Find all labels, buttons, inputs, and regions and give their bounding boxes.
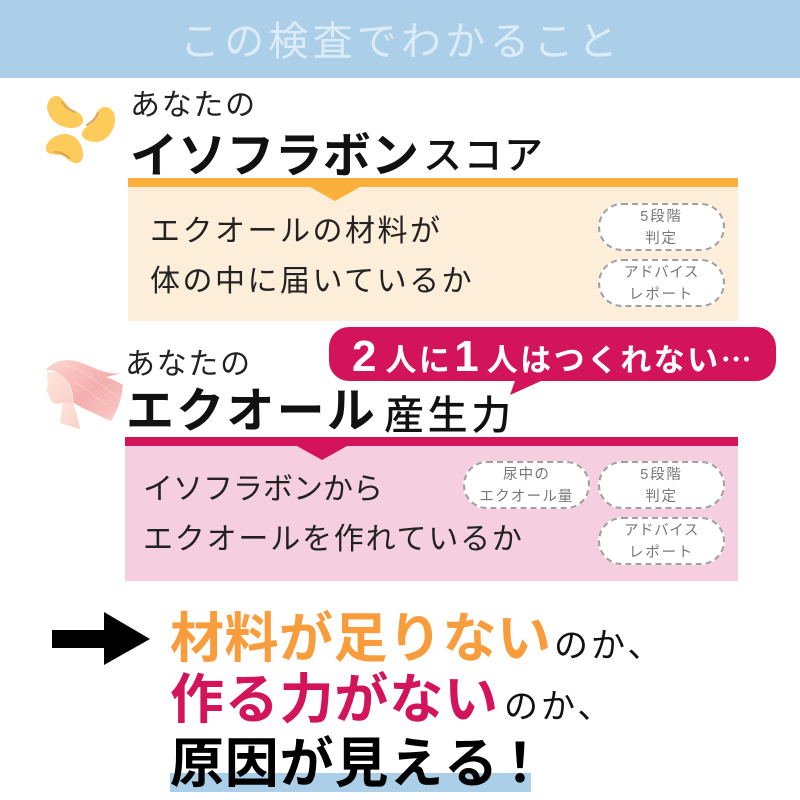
text: equol description: エクオールを作れているか	[143, 523, 524, 556]
text: isoflavone description	[150, 215, 474, 298]
text: isoflavone description: 体の中に届いているか	[150, 265, 474, 298]
crimson pointer	[297, 446, 347, 460]
title: この検査でわかること	[180, 20, 622, 64]
panel: equol	[125, 437, 738, 581]
heading: isoflavone score	[130, 89, 545, 183]
conclusion	[170, 609, 664, 794]
line: lacking material: 材料が足りない	[170, 609, 552, 669]
icon: soybeans	[46, 96, 115, 164]
tag: advice report: アドバイス	[624, 265, 699, 281]
text: equol description: イソフラボンから	[143, 473, 383, 506]
text: isoflavone description: エクオールの材料が	[150, 215, 442, 248]
orange bar	[128, 178, 738, 187]
line: cause revealed: 原因が見える！	[170, 734, 548, 794]
tag: urinary equol: 尿中の	[503, 467, 550, 483]
tag: advice report: レポート	[629, 286, 694, 302]
underline highlight	[170, 773, 531, 792]
heading: equol production	[125, 348, 515, 438]
crimson bar	[125, 437, 738, 446]
label: equol: エクオール	[126, 385, 377, 438]
callout: one in two	[329, 327, 776, 395]
arrow	[52, 612, 150, 665]
callout text: 2人に1人はつくれない…	[352, 332, 754, 381]
line: lacking power: 作る力がない	[170, 670, 499, 730]
label: score: スコア	[423, 135, 545, 178]
tag: advice report	[598, 517, 725, 565]
tag: five-level rating: 判定	[645, 488, 678, 504]
text: equol description	[143, 473, 524, 556]
orange pointer	[310, 187, 360, 201]
tag: five-level rating: 5段階	[640, 467, 683, 483]
tag: five-level rating	[598, 203, 725, 251]
label: production power: 産生力	[384, 394, 515, 438]
icon: woman with flowing hair	[45, 360, 123, 429]
tag: urinary equol: エクオール量	[479, 488, 574, 504]
line: of power suffix: のか、	[504, 688, 614, 726]
tag: advice report: レポート	[629, 544, 694, 560]
tag: five-level rating: 判定	[645, 230, 678, 246]
tag: advice report	[598, 259, 725, 307]
tag: urinary equol	[463, 461, 590, 509]
label: anata no: あなたの	[130, 89, 257, 122]
label: anata no: あなたの	[125, 348, 252, 381]
tag: advice report: アドバイス	[624, 523, 699, 539]
tag: five-level rating: 5段階	[640, 209, 683, 225]
label: isoflavone: イソフラボン	[130, 130, 419, 183]
header band	[0, 0, 800, 78]
line: of material suffix: のか、	[554, 627, 664, 665]
tag: five-level rating	[598, 461, 725, 509]
panel: isoflavone	[128, 178, 738, 321]
callout bubble	[329, 327, 776, 395]
